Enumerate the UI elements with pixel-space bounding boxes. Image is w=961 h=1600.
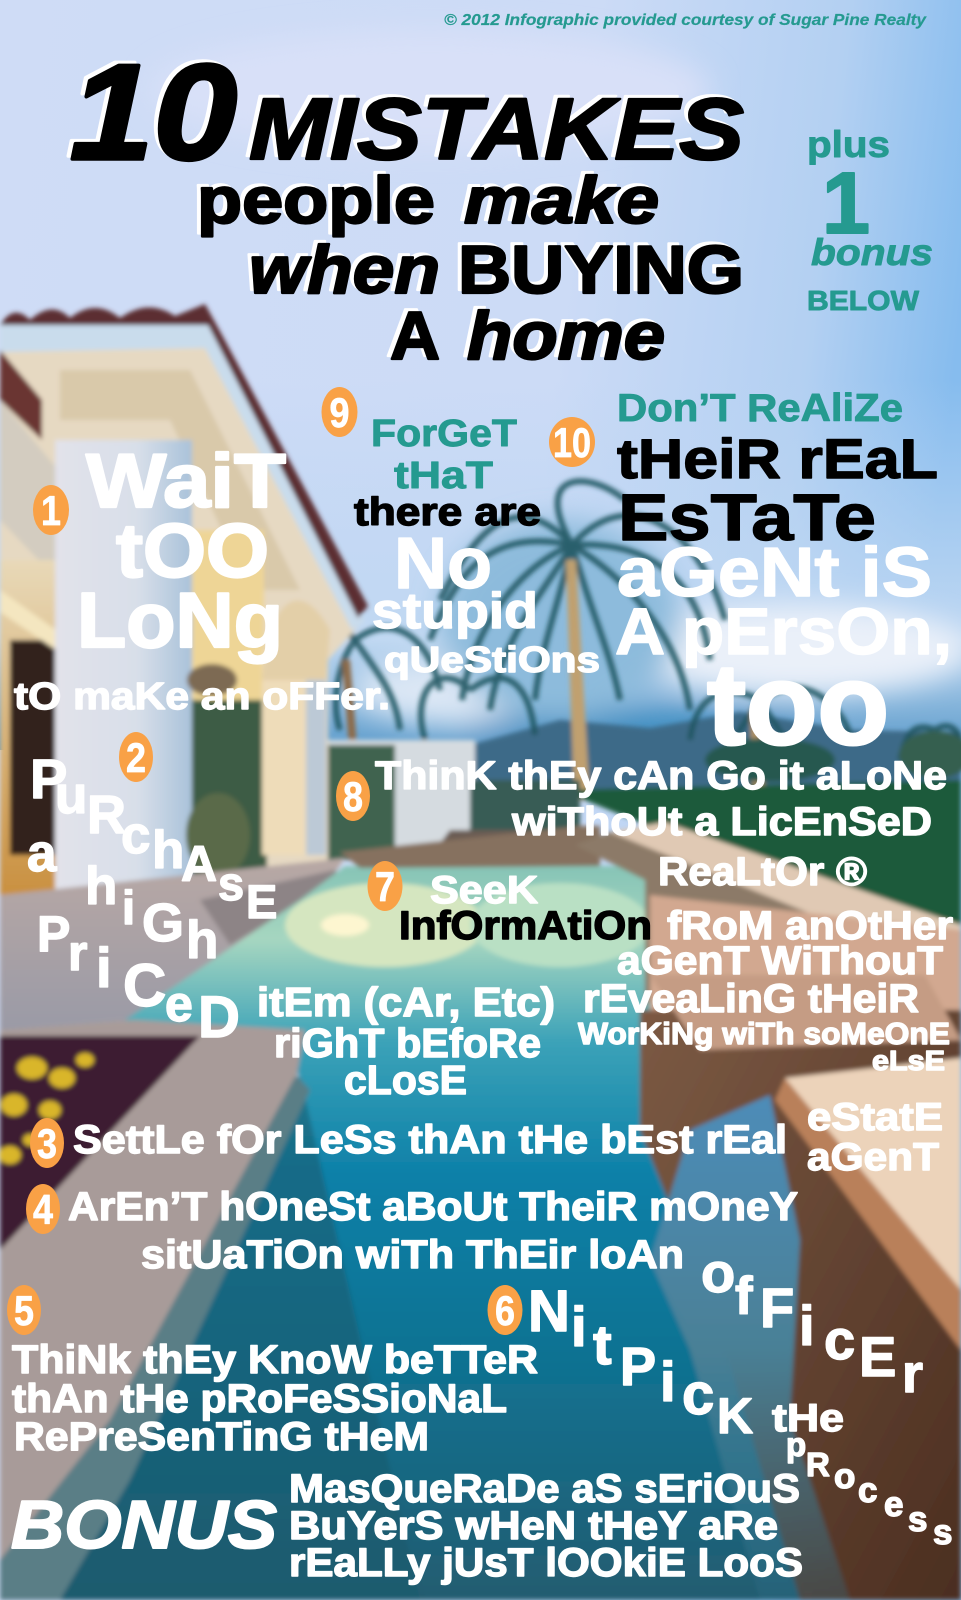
plus 1 bonus below (807, 124, 933, 316)
mistake 2 scattered letters: h (186, 911, 218, 970)
mistake 6 scattered letters: P (620, 1337, 656, 1397)
badge 1 (33, 485, 69, 535)
mistake 4 text (68, 1185, 798, 1277)
mistake 7 text: aGenT WiThouT (617, 939, 943, 983)
right ledge (575, 832, 961, 1010)
credit line: © 2012 Infographic provided courtesy of Sugar Pine Realty (444, 12, 927, 29)
mistake 10 (549, 387, 952, 769)
mistake 9 text: stupid (372, 583, 538, 639)
mistake 2 scattered letters: R (87, 785, 126, 845)
lower deck and path (0, 1020, 305, 1600)
right stone wall (640, 1010, 961, 1600)
mistake 6 scattered letters: i (571, 1295, 587, 1358)
badge 4: 4 (33, 1186, 54, 1233)
mistake 3 text: aGenT (807, 1136, 939, 1179)
bonus text (289, 1467, 803, 1585)
mistake 2 (27, 732, 555, 1103)
bonus text: rEaLLy jUsT lOOkiE LooS (289, 1541, 803, 1585)
mistake 1 text: tO maKe an oFFer. (14, 676, 390, 718)
mistake 6 scattered letters: F (760, 1276, 794, 1339)
title: when (249, 232, 440, 308)
badge 6 (488, 1285, 522, 1335)
mistake 7 text: SeeK (430, 869, 538, 912)
mistake 2 scattered letters: cLosE (344, 1057, 467, 1103)
mistake 10 text: too (707, 641, 889, 769)
badge 5: 5 (14, 1287, 34, 1334)
mistake 9 (322, 387, 600, 680)
title: A (390, 298, 440, 374)
mistake 5 text: ThiNk thEy KnoW beTTeR (12, 1338, 538, 1382)
mistake 6 scattered letters: R (806, 1446, 830, 1483)
plus 1 bonus below: bonus (811, 232, 933, 273)
mistake 2 scattered letters: A (181, 836, 217, 892)
mistake 3 text (73, 1096, 943, 1179)
mistake 4 text: sitUaTiOn wiTh ThEir loAn (141, 1233, 684, 1277)
title (70, 36, 744, 374)
mistake 6 scattered letters: c (682, 1362, 714, 1427)
stone deck (0, 858, 345, 1030)
mistake 6 scattered letters: K (717, 1388, 753, 1444)
mistake 2 scattered letters: a (27, 824, 57, 883)
mistake 9 text: qUeStiOns (384, 639, 600, 680)
badge 9: 9 (330, 389, 350, 436)
mistake 6 scattered letters: o (701, 1241, 735, 1304)
cream ledge (785, 1058, 961, 1300)
mistake 5 text: thAn tHe pRoFeSSioNaL (12, 1377, 507, 1421)
mistake 6 scattered letters: i (660, 1350, 676, 1413)
mistake 3 text: eStatE (807, 1096, 943, 1139)
mistake 1 text: LoNg (77, 576, 283, 664)
mistake 6 scattered letters: N (528, 1279, 570, 1344)
mistake 7 text: eLsE (872, 1045, 945, 1076)
mistake 2 scattered letters: P (30, 747, 67, 810)
lawn (560, 780, 961, 940)
badge 2: 2 (126, 734, 146, 781)
mistake 6 scattered letters: t (593, 1313, 612, 1376)
mistake 9 text: tHaT (394, 455, 493, 497)
mistake 2 scattered letters: P (37, 906, 70, 962)
badge 6: 6 (495, 1287, 515, 1334)
mistake 10 text: EsTaTe (618, 480, 876, 554)
mistake 9 text: there are (354, 491, 541, 534)
mistake 2 scattered letters: u (55, 766, 87, 825)
mistake 8 text: ReaLtOr ® (658, 850, 867, 894)
mistake 4 text: ArEn’T hOneSt aBoUt TheiR mOneY (68, 1185, 798, 1229)
title: BUYING (458, 232, 744, 308)
mistake 6 scattered letters: s (933, 1513, 952, 1552)
mistake 2 scattered letters: D (198, 985, 240, 1050)
mistake 9 text: ForGeT (371, 413, 517, 455)
mistake 6 scattered letters: o (834, 1457, 855, 1496)
mistake 6 scattered letters (528, 1241, 952, 1552)
mistake 2 scattered letters: c (121, 806, 150, 865)
flower bed (0, 1036, 200, 1250)
mistake 2 scattered letters: h (85, 857, 117, 916)
mistake 2 scattered letters: s (218, 857, 244, 910)
mistake 1 (14, 439, 390, 718)
title: 10 (70, 36, 237, 188)
title: MISTAKES (249, 81, 744, 178)
title: make (464, 163, 659, 237)
mistake 8 text (375, 754, 947, 894)
title: home (467, 298, 665, 374)
mistake 1 text: tOO (116, 509, 269, 594)
mistake 2 scattered letters: E (246, 875, 277, 928)
mistake 6 scattered letters: i (799, 1294, 815, 1357)
mistake 2 scattered letters: i (122, 881, 135, 934)
mistake 2 scattered letters: i (96, 936, 112, 999)
mistake 10 text: aGeNt iS (617, 533, 932, 611)
mistake 10 text: tHeiR rEaL (617, 427, 938, 490)
mistake 7 text: rEveaLinG tHeiR (583, 977, 919, 1021)
plus 1 bonus below: plus (807, 124, 890, 165)
mistake 4 (26, 1184, 798, 1277)
mistake 2 scattered letters: e (165, 976, 193, 1032)
badge 1: 1 (41, 487, 61, 534)
mistake 6 scattered letters: E (859, 1325, 896, 1388)
mistake 7 text: InfOrmAtiOn (399, 904, 652, 948)
mistake 10 text (615, 387, 952, 769)
badge 2 (119, 732, 153, 782)
mistake 9 text (354, 413, 600, 680)
far end steps (340, 826, 600, 868)
mistake 7 text: WorKiNg wiTh soMeOnE (578, 1016, 950, 1051)
mistake 7 text: fRoM anOtHer (667, 904, 953, 948)
mistake 5 text (12, 1338, 538, 1459)
mistake 6 scattered letters: c (824, 1308, 855, 1371)
mistake 3 (30, 1096, 943, 1179)
mistake 2 scattered letters: h (152, 821, 184, 880)
mistake 6 scattered letters: e (884, 1485, 903, 1524)
mistake 2 scattered letters: riGhT bEfoRe (274, 1020, 541, 1066)
bonus mistake (11, 1467, 803, 1585)
badge 3: 3 (37, 1120, 57, 1167)
badge 5 (7, 1285, 41, 1335)
badge 4 (26, 1184, 60, 1234)
mistake 6 scattered letters: r (902, 1344, 923, 1404)
mistake 8 text: wiThoUt a LicEnSeD (511, 800, 932, 844)
mistake 6 (488, 1241, 952, 1552)
mistake 6 scattered letters: c (858, 1471, 877, 1510)
title: people (197, 163, 435, 237)
mistake 2 scattered letters (27, 747, 555, 1103)
mistake 2 scattered letters: itEm (cAr, Etc) (257, 979, 555, 1025)
bonus heading: BONUS (11, 1487, 277, 1563)
mistake 5 (7, 1285, 538, 1459)
mistake 5 text: RePreSenTinG tHeM (14, 1415, 429, 1459)
badge 10: 10 (553, 419, 591, 466)
badge 7 (368, 861, 402, 911)
mistake 8 (336, 754, 947, 894)
mistake 6 scattered letters: s (908, 1500, 927, 1539)
palm foliage (313, 481, 961, 770)
badge 3 (30, 1118, 64, 1168)
badge 8: 8 (343, 773, 363, 820)
bonus text: BuYerS wHeN tHeY aRe (289, 1504, 778, 1548)
building soffit and walls (0, 340, 362, 900)
mistake 6 scattered letters: p (786, 1426, 806, 1463)
mistake 10 text: Don’T ReAliZe (617, 387, 903, 430)
mistake 2 scattered letters: C (123, 952, 166, 1019)
pool (60, 866, 840, 1600)
mistake 9 text: No (394, 524, 492, 604)
badge 8 (336, 771, 370, 821)
mistake 7 text (399, 869, 953, 1076)
plus 1 bonus below: 1 (822, 155, 870, 252)
waterfall (650, 1095, 850, 1600)
mistake 6 scattered letters: f (735, 1267, 753, 1326)
mistake 7 (368, 861, 953, 1076)
bonus text: MasQueRaDe aS sEriOuS (289, 1467, 800, 1511)
badge 9 (322, 387, 358, 437)
mistake 8 text: ThinK thEy cAn Go it aLoNe (375, 754, 947, 798)
hills (470, 712, 961, 800)
mistake 10 text: A pErsOn, (615, 594, 952, 668)
mistake 1 text: WaiT (86, 439, 286, 524)
mistake 3 text: SettLe fOr LeSs thAn tHe bEst rEal (73, 1118, 787, 1162)
badge 7: 7 (375, 863, 395, 910)
plus 1 bonus below: BELOW (807, 285, 920, 316)
mistake 2 scattered letters: r (68, 925, 87, 981)
far wall and foliage behind the pool (325, 740, 475, 860)
mistake 6 scattered letters: tHe (772, 1397, 844, 1440)
mistake 2 scattered letters: G (142, 893, 184, 953)
mistake 1 text (14, 439, 390, 718)
